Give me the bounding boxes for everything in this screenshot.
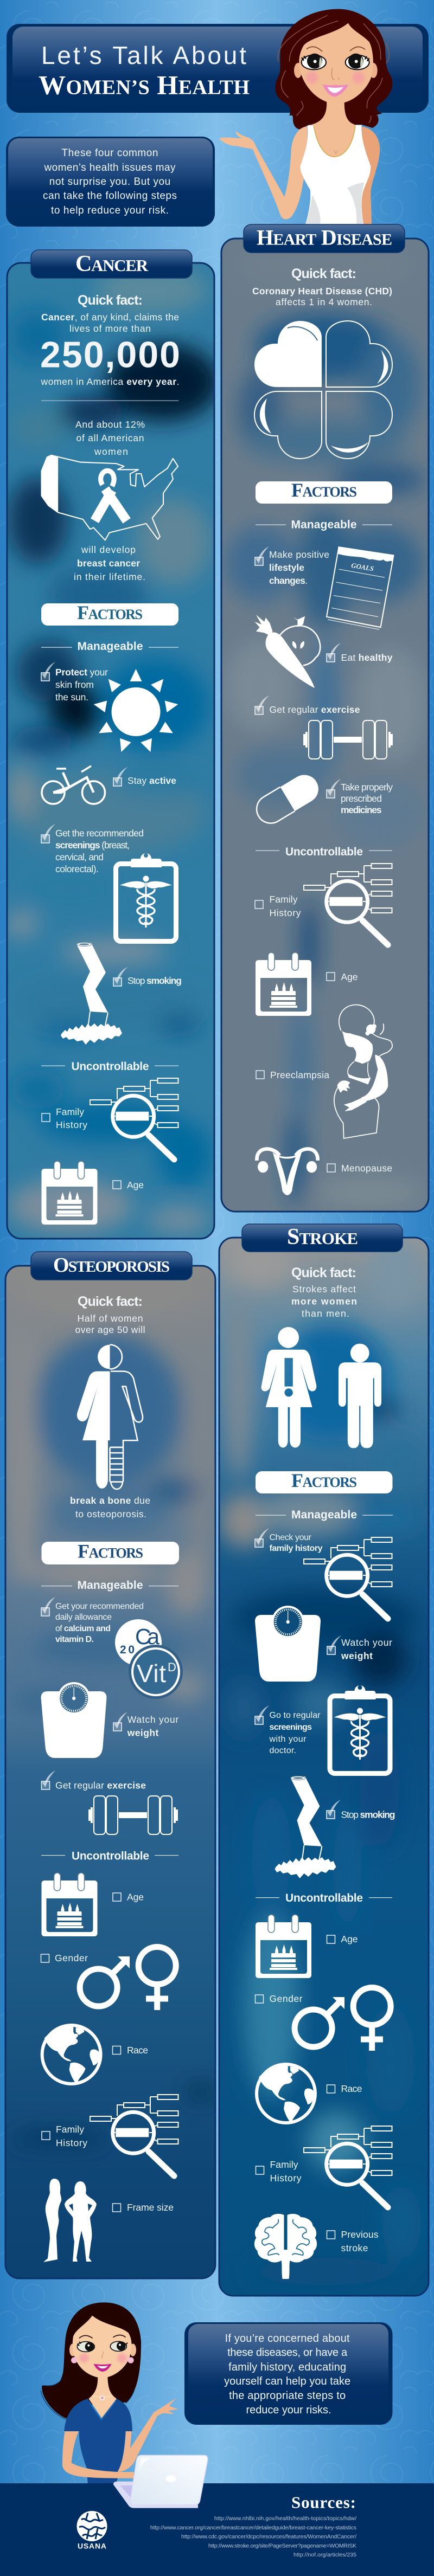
quick fact: heart disease: affects 1 in 4 women. [276, 297, 372, 307]
subheading: manageable: Manageable [291, 518, 357, 531]
factor: gender: Gender [269, 1993, 303, 2004]
quick fact: osteoporosis: to osteoporosis. [75, 1509, 146, 1519]
factor: calcium and vitamin D: vitamin D. [55, 1635, 94, 1644]
panel: intro text: These four common [62, 147, 158, 159]
factors pill [41, 1541, 179, 1564]
icon: clipboard caduceus [116, 853, 176, 941]
factor: medicines [327, 779, 393, 815]
icon: family tree magnifier [90, 1078, 178, 1160]
factor: exercise [255, 695, 360, 715]
icon: family tree magnifier [304, 1537, 392, 1619]
factor: calcium and vitamin D: daily allowance [55, 1613, 112, 1622]
quick fact: stroke: more women [291, 1296, 357, 1307]
factor: family history: History [269, 907, 301, 918]
factor: screenings: cervical, and [55, 852, 104, 862]
title [39, 41, 250, 100]
factors pill: FACTORS [291, 479, 357, 501]
factor: family history [256, 2159, 302, 2184]
factor: protect skin [41, 662, 108, 703]
factor: family history: History [56, 2137, 87, 2148]
factor: age: Age [341, 971, 358, 982]
factor: weight [327, 1635, 392, 1661]
illustration: woman presenting [219, 9, 392, 224]
icon: weight scale [41, 1682, 106, 1758]
panel background: heart disease [222, 239, 428, 1211]
factor: family history check: family history [269, 1544, 323, 1553]
stat: 12% breast cancer: will develop [81, 544, 136, 555]
quick fact: heart disease: Quick fact: [291, 266, 356, 281]
factor: family history check [255, 1528, 323, 1553]
panel: stroke [219, 1224, 429, 2296]
factor: weight: Watch your [341, 1637, 392, 1648]
icon: carrot and apple [254, 615, 320, 688]
icon: weight scale [255, 1606, 321, 1682]
quick fact: cancer: Cancer, of any kind, claims the [41, 312, 179, 323]
quick fact: osteoporosis: Quick fact: [78, 1294, 143, 1309]
icon: family tree magnifier [304, 864, 392, 945]
panel: cancer [5, 250, 220, 1239]
factor: screenings: Get the recommended [55, 828, 144, 839]
factor: family history [255, 894, 301, 918]
factor: screenings: screenings (breast, [55, 840, 130, 851]
factors pill: FACTORS [77, 602, 143, 623]
factor: screenings: colorectal). [55, 864, 99, 874]
factor: protect skin: the sun. [55, 692, 88, 703]
factor: lifestyle changes: changes. [269, 575, 308, 586]
subheading: uncontrollable: Uncontrollable [285, 846, 363, 858]
factor: weight: weight [127, 1727, 158, 1738]
factor: lifestyle changes [255, 546, 329, 586]
icon: birthday calendar [41, 1873, 98, 1936]
factor: calcium and vitamin D: Get your recommended [55, 1602, 144, 1611]
quick fact: stroke: Quick fact: [291, 1265, 356, 1280]
sources: Sources: [291, 2493, 356, 2512]
USANA logo [77, 2511, 107, 2551]
subheading: manageable: Manageable [77, 640, 143, 653]
factor: medicines: medicines [341, 804, 382, 815]
footer band [0, 2455, 434, 2576]
factor: previous stroke: stroke [341, 2243, 368, 2253]
quick fact: cancer: Quick fact: [78, 293, 143, 308]
factor: medicines: Take properly [341, 782, 393, 793]
factor: stop smoking [327, 1800, 395, 1820]
factor: screenings [41, 824, 144, 874]
sources: http://nof.org/articles/235 [293, 2552, 356, 2558]
factor: lifestyle changes: Make positive [269, 549, 329, 560]
factor: weight: weight [341, 1651, 373, 1661]
subheading: manageable: Manageable [291, 1509, 357, 1521]
quick fact: osteoporosis: break a bone due [70, 1495, 150, 1506]
icon: four-part heart clover [254, 321, 392, 459]
factor: calcium and vitamin D: of calcium and [55, 1624, 111, 1633]
quick fact: cancer: women in America every year. [40, 376, 179, 387]
panel: closing message: the appropriate steps to [229, 2390, 346, 2401]
factor: lifestyle changes: lifestyle [269, 562, 304, 573]
factor: exercise: Get regular exercise [269, 704, 360, 715]
factor: race [113, 2045, 148, 2056]
panel: intro text: can take the following steps [43, 190, 177, 202]
factor: race: Race [127, 2045, 148, 2056]
icon: clipboard caduceus [330, 1685, 390, 1774]
sources [150, 2493, 356, 2558]
factor: race [327, 2083, 362, 2094]
factor: screenings: screenings [269, 1723, 312, 1732]
icon: sun [93, 669, 179, 754]
panel: osteoporosis [5, 1252, 217, 2278]
factors pill [256, 479, 392, 504]
panel: intro text: not surprise you. But you [49, 176, 170, 188]
factor: race: Race [341, 2083, 362, 2094]
factor: frame size: Frame size [127, 2202, 174, 2213]
quick fact: cancer: 250,000 [40, 334, 180, 375]
factor: family history check: Check your [269, 1533, 312, 1542]
factor: stop smoking [113, 967, 182, 986]
panel background: stroke [220, 1236, 428, 2295]
icon: woman with fragile bone [77, 1345, 143, 1489]
panel: closing message: If you’re concerned about [225, 2333, 350, 2345]
factor: exercise: Get regular exercise [55, 1780, 146, 1791]
icon: brain [254, 2214, 317, 2279]
factor: preeclampsia: Preeclampsia [270, 1070, 329, 1080]
stat: 12% breast cancer: in their lifetime. [74, 571, 145, 582]
icon: capsule [251, 770, 324, 828]
title: WOMEN’S HEALTH [39, 69, 250, 100]
icon: calcium and vitamin D: Vit [137, 1659, 166, 1688]
subheading: uncontrollable: Uncontrollable [72, 1060, 149, 1073]
factor: age [113, 1180, 144, 1190]
icon: globe [42, 2025, 101, 2084]
factor: calcium and vitamin D [41, 1597, 144, 1644]
factor: stay active [113, 767, 176, 786]
icon: bicycle [42, 766, 105, 804]
factor: family history: Family [56, 2124, 84, 2135]
sources: http://www.cancer.org/cancer/breastcancer/detailedguide/breast-cancer-key-statistics [150, 2525, 356, 2531]
subheading: manageable: Manageable [77, 1579, 143, 1592]
icon: dumbbell [303, 720, 393, 759]
factor: gender [255, 1993, 303, 2004]
icon: broken cigarette [61, 942, 122, 1045]
factor: protect skin: Protect your [55, 667, 108, 678]
sources: http://www.nhlbi.nih.gov/health/health-topics/topics/hdw/ [214, 2515, 356, 2522]
icon: globe [257, 2064, 315, 2123]
USANA logo: USANA [78, 2542, 106, 2551]
panel: intro text: to help reduce your risk. [51, 205, 169, 216]
icon: goals notepad: GOALS [350, 562, 374, 572]
stat: 12% breast cancer: breast cancer [77, 558, 140, 569]
factor: menopause: Menopause [341, 1163, 392, 1174]
factors pill: FACTORS [78, 1541, 143, 1562]
icon: calcium and vitamin D [115, 1619, 181, 1697]
quick fact: osteoporosis: Half of women [77, 1313, 143, 1324]
heading tab: osteoporosis: OSTEOPOROSIS [53, 1254, 170, 1277]
panel background: osteoporosis [6, 1266, 217, 2278]
factor: age: Age [341, 1934, 358, 1944]
quick fact: stroke [291, 1265, 357, 1319]
quick fact: cancer: lives of more than [69, 323, 151, 334]
icon: dumbbell [88, 1796, 178, 1834]
panel: closing message: family history, educating [228, 2361, 346, 2373]
factor: stop smoking: Stop smoking [341, 1809, 395, 1820]
quick fact: stroke: Strokes affect [292, 1284, 356, 1295]
stat: 12% breast cancer [74, 419, 145, 582]
icon: gender symbols [295, 1987, 391, 2051]
icon: pregnant woman [334, 1005, 392, 1138]
factors pill: FACTORS [291, 1470, 357, 1491]
factor: family history: Family [56, 1106, 84, 1117]
factor: screenings: doctor. [269, 1746, 296, 1755]
heading tab: stroke [242, 1224, 403, 1252]
panel: closing message: reduce your risks. [246, 2404, 331, 2416]
panel: header [7, 24, 429, 113]
icon: birthday calendar [41, 1161, 98, 1225]
icon: family tree magnifier [90, 2095, 178, 2176]
quick fact: stroke: than men. [302, 1308, 349, 1319]
factor: eat healthy [327, 643, 393, 663]
heading tab: stroke: STROKE [287, 1225, 358, 1250]
icon: calcium and vitamin D: D [168, 1660, 176, 1674]
factor: weight: Watch your [127, 1714, 178, 1725]
heading tab: heart disease: HEART DISEASE [257, 226, 392, 249]
icon: uterus [257, 1149, 318, 1195]
factor: medicines: prescribed [341, 793, 382, 804]
panel: closing message: these diseases, or have a [227, 2347, 348, 2359]
title: Let’s Talk About [41, 41, 246, 69]
factor: age: Age [127, 1180, 144, 1190]
factor: stay active: Stay active [127, 775, 176, 786]
quick fact: heart disease [252, 266, 392, 307]
quick fact: heart disease: Coronary Heart Disease (CHD) [252, 286, 392, 297]
laptop [113, 2455, 208, 2508]
factor: gender: Gender [55, 1953, 88, 1963]
heading tab: osteoporosis [31, 1252, 192, 1280]
factor: family history: History [56, 1119, 87, 1130]
icon: goals notepad [327, 547, 394, 629]
icon: calcium and vitamin D: 20 [120, 1644, 135, 1656]
factor: screenings [255, 1705, 321, 1755]
factor: protect skin: skin from [55, 679, 94, 690]
factor: screenings: Go to regular [269, 1711, 321, 1720]
factor: family history: History [270, 2173, 302, 2184]
panel: closing message [184, 2322, 393, 2425]
icon: body frames [43, 2179, 97, 2262]
stat: 12% breast cancer: of all American [76, 433, 144, 443]
subheading: uncontrollable: Uncontrollable [285, 1892, 363, 1904]
factor: family history: Family [270, 2159, 298, 2170]
factor: family history [42, 2124, 87, 2148]
panel: heart disease [221, 224, 429, 1212]
factors pill [41, 602, 178, 626]
factor: eat healthy: Eat healthy [341, 652, 393, 663]
factors pill [256, 1470, 393, 1493]
panel background: cancer [5, 263, 220, 1239]
quick fact: osteoporosis [70, 1294, 150, 1519]
icon: birthday calendar [256, 952, 311, 1016]
sources: http://www.cdc.gov/cancer/dcpc/resources/features/WomenAndCancer/ [181, 2534, 356, 2540]
factor: exercise [41, 1770, 146, 1791]
panel: intro text [6, 137, 215, 227]
icon: USA map with ribbon [42, 455, 178, 540]
factor: screenings: with your [269, 1735, 307, 1744]
heading tab: cancer [31, 250, 192, 278]
icon: birthday calendar [256, 1915, 311, 1978]
icon: broken cigarette [275, 1776, 336, 1878]
icon: calcium and vitamin D: Ca [135, 1624, 159, 1649]
panel: intro text: women’s health issues may [43, 162, 176, 173]
stat: 12% breast cancer: And about 12% [75, 419, 145, 430]
quick fact: cancer [40, 293, 180, 387]
factor: previous stroke [327, 2229, 379, 2253]
panel: closing message: yourself can help you take [224, 2375, 350, 2387]
factor: weight [113, 1712, 178, 1738]
factor: family history: Family [269, 894, 298, 905]
quick fact: osteoporosis: over age 50 will [75, 1324, 145, 1335]
icon: woman and man figures [261, 1327, 381, 1448]
factor: family history [42, 1106, 87, 1130]
factor: age [113, 1892, 144, 1903]
factor: age [327, 971, 358, 982]
factor: previous stroke: Previous [341, 2229, 379, 2240]
factor: age [327, 1934, 358, 1944]
icon: family tree magnifier [304, 2126, 392, 2207]
sources: http://www.stroke.org/site/PageServer?pagename=WOMRISK [208, 2542, 356, 2549]
illustration: woman with laptop [41, 2302, 178, 2483]
icon: gender symbols [80, 1947, 176, 2010]
factor: stop smoking: Stop smoking [127, 975, 182, 986]
subheading: uncontrollable: Uncontrollable [72, 1850, 149, 1863]
stat: 12% breast cancer: women [94, 446, 128, 457]
heading tab: cancer: CANCER [75, 252, 149, 276]
factor: age: Age [127, 1892, 144, 1903]
